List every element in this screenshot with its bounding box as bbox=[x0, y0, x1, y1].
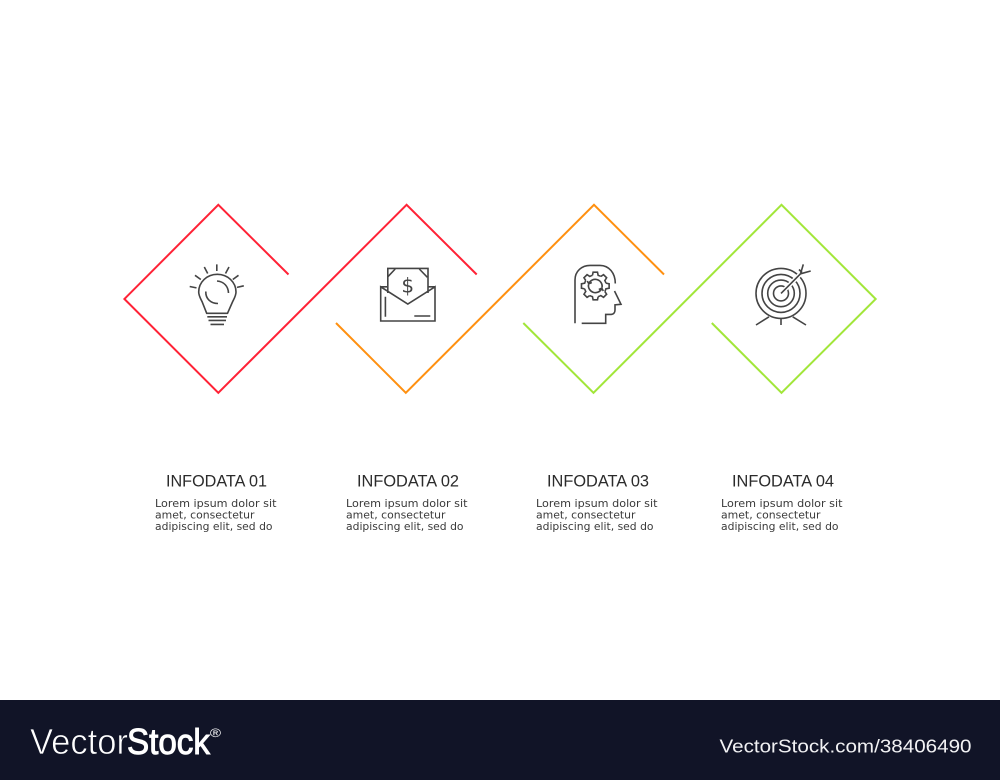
footer logo: ® bbox=[210, 726, 221, 740]
green diamond outline 3 bbox=[523, 205, 876, 393]
red diamond outline 1 bbox=[124, 205, 477, 393]
body 1: amet, consectetur bbox=[155, 508, 255, 522]
column 1 text bbox=[155, 472, 277, 533]
body 3: Lorem ipsum dolor sit bbox=[536, 497, 658, 510]
body 1 bbox=[155, 497, 277, 533]
body 4 bbox=[721, 497, 843, 533]
heading 3: INFODATA 03 bbox=[547, 472, 649, 490]
heading 4: INFODATA 04 bbox=[732, 472, 834, 490]
column 3 text bbox=[536, 472, 658, 533]
body 1: adipiscing elit, sed do bbox=[155, 520, 273, 533]
column 2 text bbox=[346, 472, 468, 533]
body 4: amet, consectetur bbox=[721, 508, 821, 522]
icon: target with arrow bbox=[756, 264, 811, 325]
footer bar bbox=[0, 700, 1000, 780]
body 3 bbox=[536, 497, 658, 533]
body 3: adipiscing elit, sed do bbox=[536, 520, 654, 533]
dollar sign: $ bbox=[401, 274, 414, 298]
body 2: Lorem ipsum dolor sit bbox=[346, 497, 468, 510]
body 1: Lorem ipsum dolor sit bbox=[155, 497, 277, 510]
body 4: adipiscing elit, sed do bbox=[721, 520, 839, 533]
body 4: Lorem ipsum dolor sit bbox=[721, 497, 843, 510]
column 4 text bbox=[721, 472, 843, 533]
footer logo bbox=[30, 721, 221, 762]
gear bbox=[581, 272, 609, 300]
body 3: amet, consectetur bbox=[536, 508, 636, 522]
heading 1: INFODATA 01 bbox=[166, 472, 267, 490]
body 2: adipiscing elit, sed do bbox=[346, 520, 464, 533]
icon: envelope with dollar bill bbox=[381, 268, 435, 321]
body 2 bbox=[346, 497, 468, 533]
body 2: amet, consectetur bbox=[346, 508, 446, 522]
footer url: VectorStock.com/38406490 bbox=[720, 736, 972, 756]
orange diamond outline 2 bbox=[336, 205, 664, 393]
footer logo: Vector bbox=[30, 721, 128, 762]
icon: light bulb bbox=[190, 264, 244, 324]
heading 2: INFODATA 02 bbox=[357, 472, 459, 490]
footer logo: Stock bbox=[127, 721, 211, 762]
icon: head with gear bbox=[575, 265, 621, 323]
